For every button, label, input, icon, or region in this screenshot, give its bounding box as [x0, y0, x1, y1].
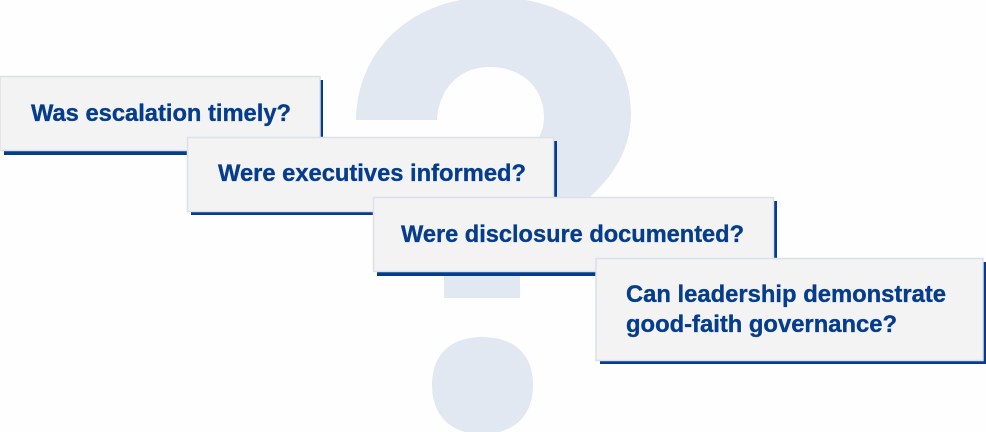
- card: can leadership demonstrate good-faith governance: [596, 258, 986, 364]
- card: was escalation timely: [0, 76, 323, 155]
- card: were executives informed: Were executives informed?: [218, 160, 526, 187]
- card: were executives informed: [188, 138, 557, 215]
- icon: background question mark: [356, 0, 631, 432]
- card: were disclosure documented: [374, 198, 777, 276]
- card: can leadership demonstrate good-faith governance: good-faith governance?: [626, 311, 897, 338]
- card: can leadership demonstrate good-faith governance: Can leadership demonstrate: [626, 281, 946, 308]
- card: were disclosure documented: Were disclosure documented?: [401, 221, 744, 248]
- card: was escalation timely: Was escalation timely?: [31, 100, 291, 127]
